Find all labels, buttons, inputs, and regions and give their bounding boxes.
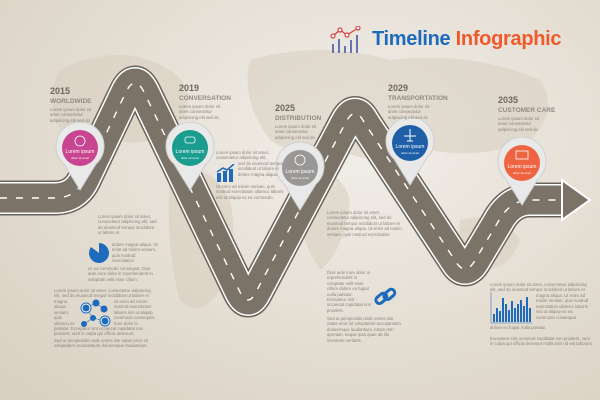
text block with bar-chart icon: Lorem ipsum dolor sit amet, consectetur adipiscing elit, bbox=[216, 150, 269, 160]
icon: pie chart bbox=[89, 243, 109, 263]
title: Timeline Infographic bbox=[372, 28, 561, 50]
text block with column chart: Excepteur sint occaecat cupidatat non proident, sunt in culpa qui officia deserunt mollit anim id est laborum. bbox=[490, 336, 593, 346]
text block with network icon: Ut enim ad minim nostrud exercitation laboris nisi ut aliquip commodo consequat. irure dolor in bbox=[114, 299, 155, 326]
pin: 2035 customer care: dolor sit amet bbox=[513, 171, 531, 175]
text block with pie icon: Lorem ipsum dolor sit amet, consectetur adipiscing elit, sed do eiusmod tempor incididunt ut labore et bbox=[98, 214, 157, 235]
text block with link icon: Duis aute irure dolor in reprehenderit in voluptate velit esse cillum dolore eu fugiat nulla pariatur. Excepteur sint occaecat cupidatat non proident. bbox=[327, 270, 371, 313]
icon: column chart bbox=[490, 292, 532, 324]
text block with network icon: pariatur. Excepteur sint occaecat cupidatat non proident, sunt in culpa qui officia deserunt. bbox=[54, 326, 143, 336]
icon: chain link bbox=[374, 288, 396, 305]
milestone 2025: DISTRIBUTION bbox=[275, 115, 321, 122]
icon: chart line bbox=[330, 26, 361, 53]
pin: 2015 worldwide: dolor sit amet bbox=[71, 156, 89, 160]
text block with column chart: magna aliqua. Ut enim ad minim veniam, quis nostrud exercitation ullamco laboris nisi ut aliquip ex ea commodo consequat. bbox=[536, 293, 588, 320]
text block with link icon bbox=[327, 270, 401, 343]
milestone 2019: 2019 bbox=[179, 83, 199, 93]
text block with bar-chart icon: sed do eiusmod tempor incididunt ut labore et dolore magna aliqua. bbox=[238, 161, 283, 177]
text block with pie icon: ex ea commodo consequat. Duis aute irure dolor in reprehenderit in voluptate velit esse cillum. bbox=[88, 266, 153, 282]
milestone 2029 bbox=[388, 83, 448, 121]
milestone 2015 bbox=[50, 86, 92, 124]
text block with pie icon bbox=[88, 214, 158, 282]
pin: 2029 transportation: Lorem ipsum bbox=[396, 144, 424, 150]
text block with column chart bbox=[490, 282, 593, 346]
milestone 2035: CUSTOMER CARE bbox=[498, 107, 555, 114]
icon: people network bbox=[80, 300, 110, 327]
milestone 2019: CONVERSATION bbox=[179, 95, 231, 102]
text block with network icon: Sed ut perspiciatis unde omnis iste natus error sit voluptatem accusantium doloremque laudantium. bbox=[54, 338, 148, 348]
pin: 2015 worldwide: Lorem ipsum bbox=[66, 149, 94, 155]
pin: 2035 customer care bbox=[498, 137, 546, 206]
milestone 2029: 2029 bbox=[388, 83, 408, 93]
pin: 2025 distribution: dolor sit amet bbox=[291, 176, 309, 180]
pin: 2019 conversation: Lorem ipsum bbox=[176, 149, 204, 155]
pin: 2029 transportation bbox=[386, 117, 434, 186]
title bbox=[330, 26, 561, 53]
arrow head bbox=[562, 180, 590, 220]
text block with bar-chart icon: Ut enim ad minim veniam, quis nostrud exercitation ullamco laboris nisi ut aliquip ex ea commodo. bbox=[216, 184, 283, 200]
text block with link icon: Sed ut perspiciatis unde omnis iste natus error sit voluptatem accusantium doloremque laudantium, totam rem aperiam, eaque ipsa quae ab illo inventore veritatis. bbox=[327, 316, 401, 343]
milestone 2035 bbox=[498, 95, 556, 133]
milestone 2035: 2035 bbox=[498, 95, 518, 105]
milestone 2025 bbox=[275, 103, 321, 141]
pin: 2025 distribution: Lorem ipsum bbox=[286, 169, 314, 175]
text block with pie icon: dolore magna aliqua. Ut enim ad minim veniam, quis nostrud exercitation bbox=[112, 242, 158, 263]
text block with column chart: dolore eu fugiat nulla pariatur. bbox=[490, 325, 547, 330]
pin: 2025 distribution bbox=[276, 142, 324, 211]
milestone 2025: 2025 bbox=[275, 103, 295, 113]
text block with network icon bbox=[54, 288, 155, 348]
milestone 2019 bbox=[179, 83, 231, 121]
pin: 2019 conversation: dolor sit amet bbox=[181, 156, 199, 160]
pin: 2029 transportation: dolor sit amet bbox=[401, 151, 419, 155]
milestone 2015: 2015 bbox=[50, 86, 70, 96]
milestone 2015: WORLDWIDE bbox=[50, 98, 92, 105]
pin: 2035 customer care: Lorem ipsum bbox=[508, 164, 536, 170]
pin: 2019 conversation bbox=[166, 122, 214, 191]
milestone 2029: TRANSPORTATION bbox=[388, 95, 448, 102]
icon: growth chart bbox=[216, 164, 234, 182]
pin: 2015 worldwide bbox=[56, 122, 104, 191]
text block with bar-chart icon bbox=[216, 150, 284, 200]
